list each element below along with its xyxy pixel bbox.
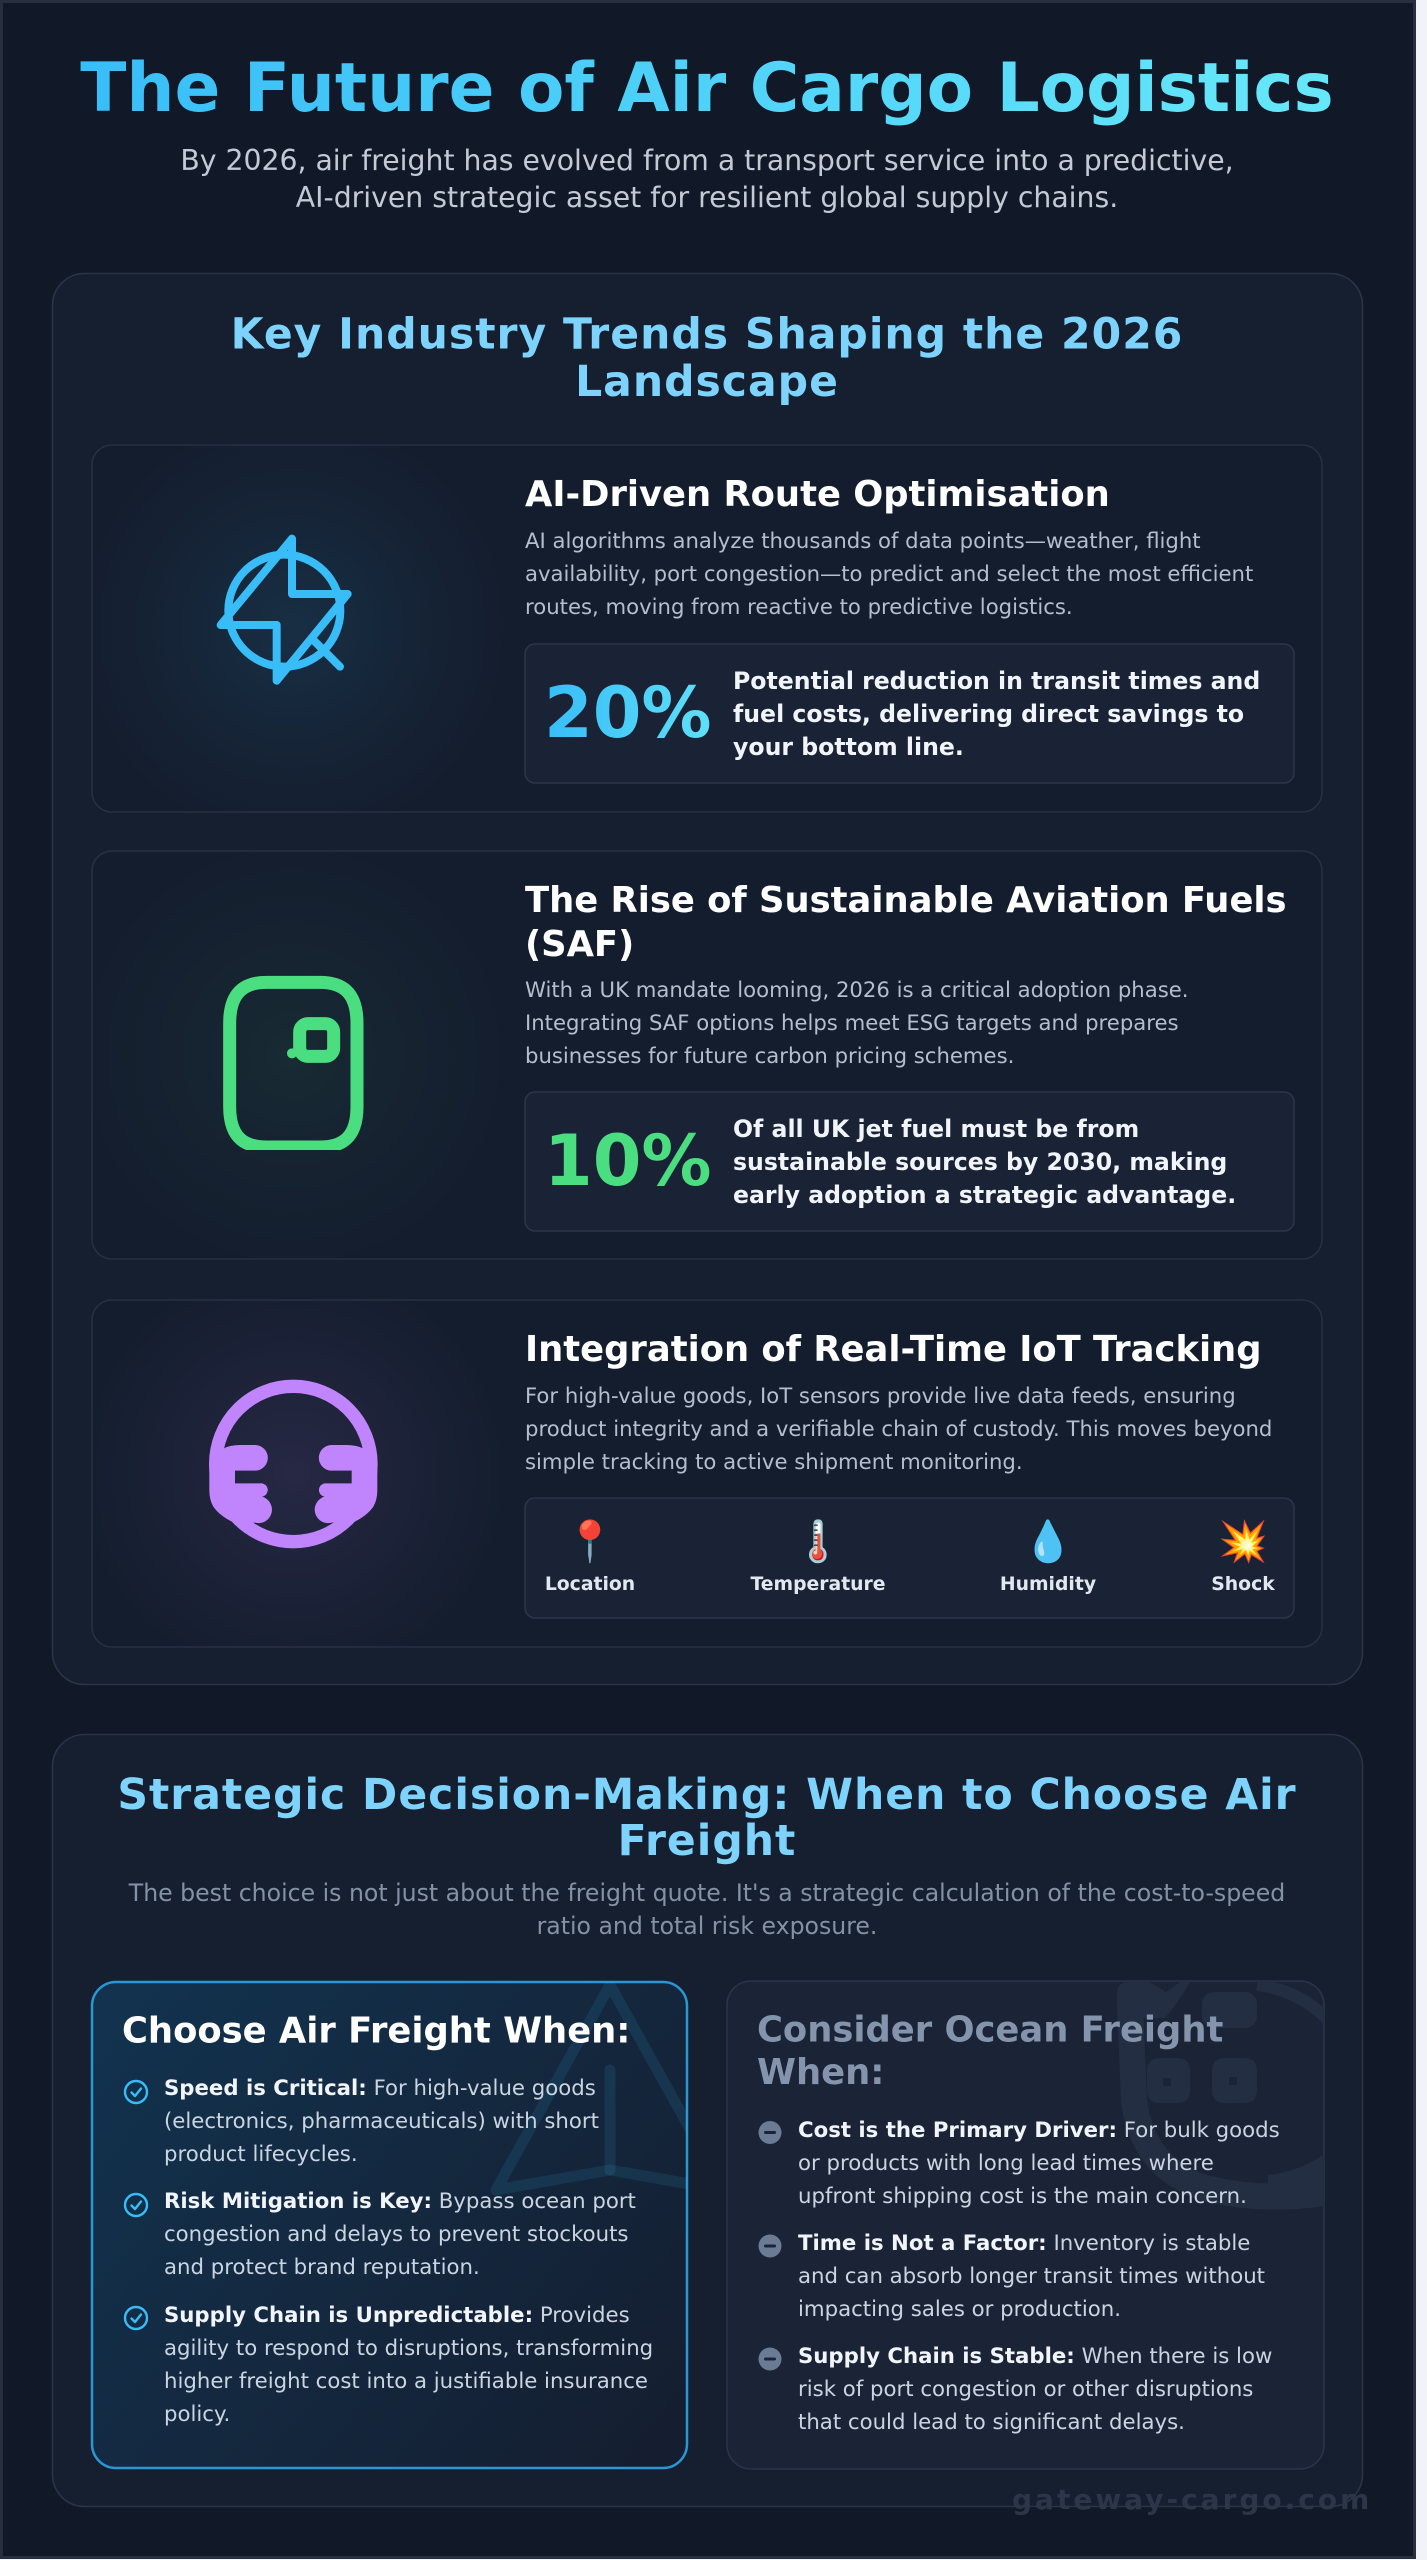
callout: 20%: fuel costs, delivering direct savings to xyxy=(733,700,1244,728)
icon: check xyxy=(125,2307,147,2329)
section heading: trends: Landscape xyxy=(575,358,839,407)
card description: simple tracking to active shipment monitoring. xyxy=(525,1449,1023,1474)
icon: minus xyxy=(758,2234,782,2258)
sensor: humidity: 💧 xyxy=(1023,1518,1073,1565)
reason: speed: (electronics, pharmaceuticals) with short xyxy=(164,2109,599,2134)
sensor: shock xyxy=(1211,1518,1275,1595)
title: The Future of Air Cargo Logistics xyxy=(80,48,1334,127)
reason: cost: upfront shipping cost is the main concern. xyxy=(798,2184,1247,2209)
card description: Integrating SAF options helps meet ESG targets and prepares xyxy=(525,1010,1179,1035)
reason: unpredictable xyxy=(125,2303,653,2427)
sensor: temperature: 🌡️ xyxy=(793,1518,843,1565)
card: AI-driven route optimisation xyxy=(92,445,1322,812)
reason: risk: and protect brand reputation. xyxy=(164,2255,480,2280)
card description: For high-value goods, IoT sensors provide live data feeds, ensuring xyxy=(525,1383,1236,1408)
section heading: decision-making xyxy=(117,1771,1297,1866)
card: IoT tracking xyxy=(92,1300,1322,1647)
callout: 20%: Potential reduction in transit times and xyxy=(733,667,1260,695)
subtitle xyxy=(180,144,1234,214)
card description: AI algorithms analyze thousands of data points—weather, flight xyxy=(525,528,1201,553)
reason: speed xyxy=(125,2076,599,2167)
card heading xyxy=(525,880,1287,965)
panel heading: Consider Ocean Freight xyxy=(757,2010,1223,2050)
callout: 10%: early adoption a strategic advantage. xyxy=(733,1181,1236,1209)
callout: 10%: sustainable sources by 2030, making xyxy=(733,1148,1227,1176)
sensor: location: 📍 xyxy=(565,1518,615,1565)
section heading: trends: Key Industry Trends Shaping the 2026 xyxy=(231,310,1183,360)
sensor: humidity: Humidity xyxy=(1000,1574,1096,1595)
reason: cost xyxy=(758,2118,1280,2209)
icon: plane watermark xyxy=(490,1983,686,2196)
section heading: trends xyxy=(231,310,1183,407)
icon: check xyxy=(125,2194,147,2216)
panel: strategic decision-making xyxy=(52,1734,1362,2506)
reason: unpredictable: Supply Chain is Unpredictable: Provides xyxy=(164,2303,630,2328)
card description xyxy=(525,528,1253,619)
icon: check xyxy=(125,2081,147,2103)
callout: 20% xyxy=(525,644,1294,783)
icon: headset sensor xyxy=(209,1386,377,1542)
panel: choose air freight xyxy=(92,1982,724,2468)
reason: stable: risk of port congestion or other disruptions xyxy=(798,2377,1253,2402)
panel heading xyxy=(757,2010,1223,2093)
card description: availability, port congestion—to predict and select the most efficient xyxy=(525,561,1253,586)
callout: 10%: Of all UK jet fuel must be from xyxy=(733,1115,1139,1143)
callout: 10%: 10% xyxy=(544,1120,712,1202)
card description: With a UK mandate looming, 2026 is a critical adoption phase. xyxy=(525,977,1189,1002)
card description: routes, moving from reactive to predictive logistics. xyxy=(525,594,1073,619)
card description xyxy=(525,1383,1272,1474)
reason: unpredictable: policy. xyxy=(164,2402,230,2427)
panel heading: When: xyxy=(757,2052,884,2093)
reason: risk: Risk Mitigation is Key: Bypass ocean port xyxy=(164,2189,636,2214)
reason: risk: congestion and delays to prevent stockouts xyxy=(164,2222,629,2247)
icon: ship watermark xyxy=(1117,1982,1330,2197)
section intro: ratio and total risk exposure. xyxy=(537,1912,877,1940)
sensor: location xyxy=(545,1518,635,1595)
sensor strip xyxy=(525,1498,1294,1618)
reason: unpredictable: higher freight cost into a justifiable insurance xyxy=(164,2369,648,2394)
sensor: temperature xyxy=(750,1518,886,1595)
icon: compass with bolt xyxy=(221,539,348,681)
sensor: shock: Shock xyxy=(1211,1574,1275,1595)
callout: 20%: your bottom line. xyxy=(733,733,964,761)
reason: cost: Cost is the Primary Driver: For bulk goods xyxy=(798,2118,1280,2143)
reason: time: and can absorb longer transit times without xyxy=(798,2264,1265,2289)
icon: fuel gauge xyxy=(230,982,357,1147)
card: sustainable aviation fuels xyxy=(92,851,1322,1259)
sensor: shock: 💥 xyxy=(1218,1518,1268,1565)
section heading: decision-making: Freight xyxy=(618,1817,796,1866)
section intro: The best choice is not just about the freight quote. It's a strategic calculation of the cost-to-speed xyxy=(128,1879,1285,1907)
card heading: (SAF) xyxy=(525,924,634,965)
panel: key industry trends xyxy=(52,274,1362,1684)
reason: unpredictable: agility to respond to disruptions, transforming xyxy=(164,2336,653,2361)
reason: time: impacting sales or production. xyxy=(798,2297,1121,2322)
reason: stable xyxy=(758,2344,1272,2435)
reason: speed: Speed is Critical: For high-value goods xyxy=(164,2076,596,2101)
reason: time: Time is Not a Factor: Inventory is stable xyxy=(798,2231,1250,2256)
icon: minus xyxy=(758,2348,782,2370)
callout: 10% xyxy=(525,1092,1294,1231)
subtitle: By 2026, air freight has evolved from a transport service into a predictive, xyxy=(180,144,1234,177)
card heading: The Rise of Sustainable Aviation Fuels xyxy=(525,880,1287,921)
reason: time xyxy=(758,2231,1265,2322)
panel: consider ocean freight xyxy=(727,1981,1330,2469)
sensor: location: Location xyxy=(545,1574,635,1595)
panel heading: Choose Air Freight When: xyxy=(122,2010,630,2052)
card description xyxy=(525,977,1189,1068)
card heading: Integration of Real-Time IoT Tracking xyxy=(525,1329,1262,1370)
reason: cost: or products with long lead times where xyxy=(798,2151,1214,2176)
watermark: site name: gateway-cargo.com xyxy=(1012,2483,1372,2516)
reason: stable: that could lead to significant delays. xyxy=(798,2410,1185,2435)
sensor: humidity xyxy=(1000,1518,1096,1595)
section intro xyxy=(128,1879,1285,1940)
card description: businesses for future carbon pricing schemes. xyxy=(525,1043,1014,1068)
reason: risk xyxy=(125,2189,636,2280)
card heading: AI-Driven Route Optimisation xyxy=(525,474,1110,515)
header xyxy=(80,48,1334,214)
subtitle: AI-driven strategic asset for resilient global supply chains. xyxy=(296,181,1118,214)
reason: speed: product lifecycles. xyxy=(164,2142,358,2167)
icon: minus xyxy=(758,2121,782,2144)
reason: stable: Supply Chain is Stable: When there is low xyxy=(798,2344,1272,2369)
callout: 20%: 20% xyxy=(544,672,712,754)
card description: product integrity and a verifiable chain of custody. This moves beyond xyxy=(525,1416,1272,1441)
sensor: temperature: Temperature xyxy=(750,1574,886,1595)
section heading: decision-making: Strategic Decision-Making: When to Choose Air xyxy=(117,1771,1297,1820)
